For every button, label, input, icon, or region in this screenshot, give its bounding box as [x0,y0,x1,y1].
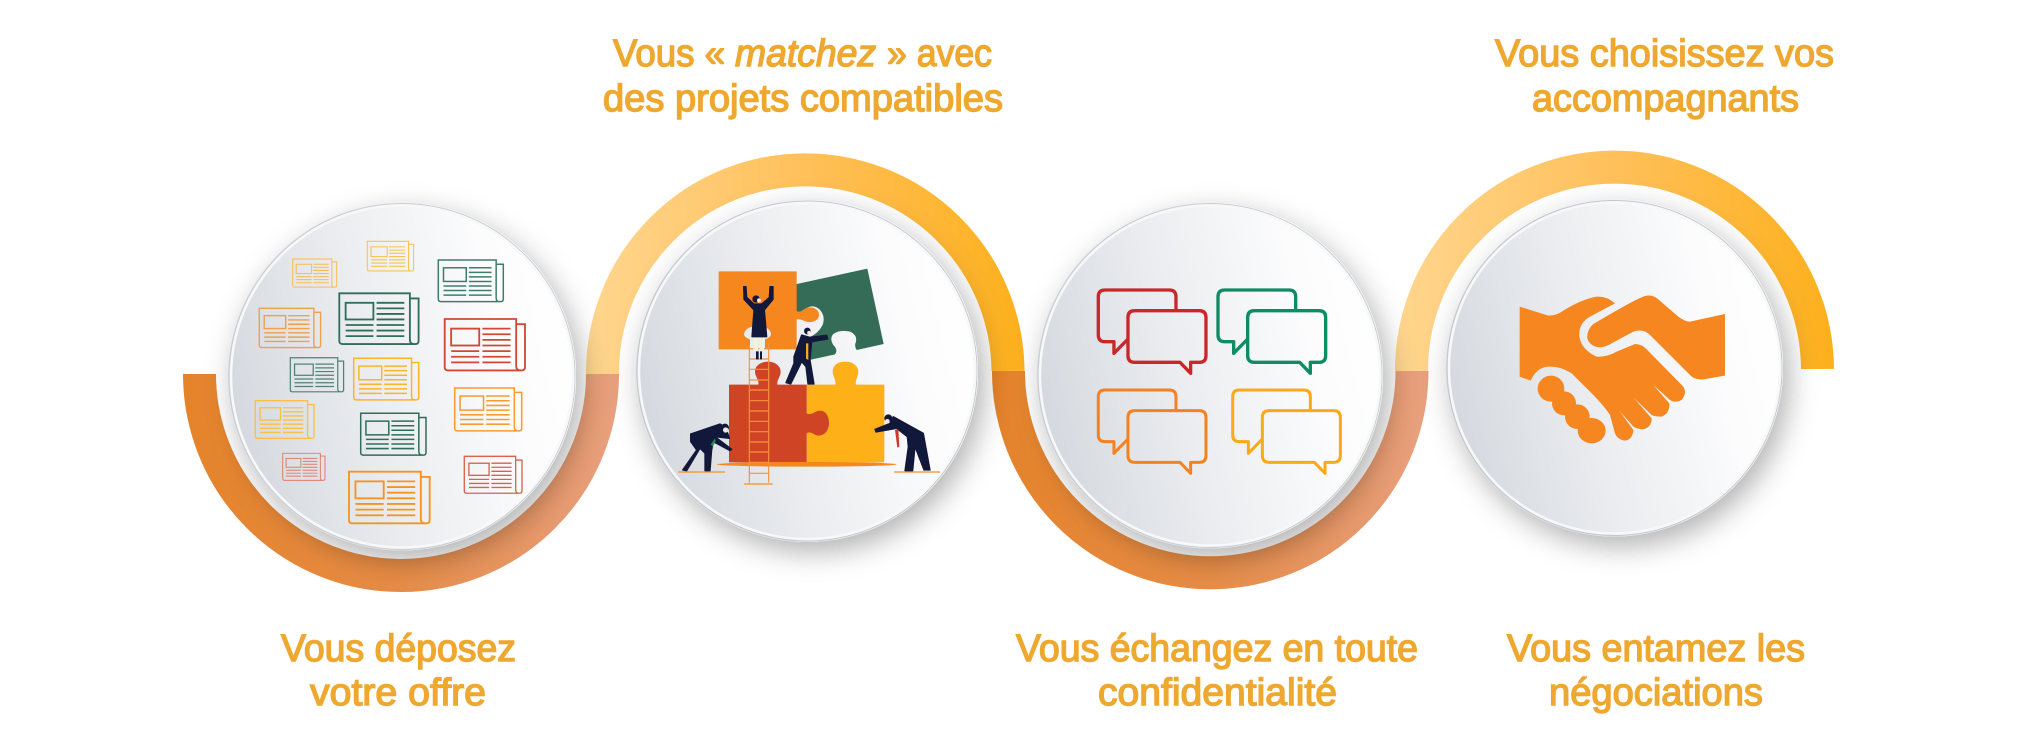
heading: step 3 label [1016,628,1418,714]
arc: step 1 lower orange ring [200,374,602,576]
heading: step 1 label [281,628,516,714]
panel: step 4 handshake disc [1446,200,1783,536]
heading: step 4 top label: accompagnants [1532,78,1799,120]
arc: step 2 upper yellow ring [602,170,1008,374]
heading: step 2 label: matchez [735,33,876,75]
heading: step 4 top label: Vous choisissez vos [1495,33,1834,75]
icon: yellow chat bubbles [1233,390,1340,473]
panel: step 3 chat disc [1037,202,1383,548]
heading: step 3 label: confidentialité [1098,672,1337,714]
heading: step 2 label [603,33,1003,120]
panel: step 2 puzzle disc [636,200,978,542]
heading: step 4 bottom label: Vous entamez les [1507,628,1805,670]
icon: orange chat bubbles [1098,390,1206,473]
heading: step 4 top label [1495,33,1834,120]
heading: step 1 label: Vous déposez [281,628,516,670]
heading: step 4 bottom label [1507,628,1805,714]
arc: step 3 lower orange ring [1008,371,1412,573]
icon: green chat bubbles [1218,290,1326,373]
heading: step 2 label: des projets compatibles [603,78,1003,120]
icon: red chat bubbles [1098,290,1206,373]
icon: puzzle team illustration [678,269,940,484]
heading: step 4 bottom label: négociations [1549,672,1763,714]
icon: handshake [1520,295,1725,443]
arc: step 4 upper yellow ring [1411,167,1818,371]
icon: newspapers [255,241,525,523]
heading: step 2 label: » avec [887,33,992,75]
heading: step 2 label: Vous « [613,33,725,75]
heading: step 3 label: Vous échangez en toute [1016,628,1418,670]
panel: step 1 newspapers disc [228,202,576,550]
heading: step 1 label: votre offre [310,672,486,714]
